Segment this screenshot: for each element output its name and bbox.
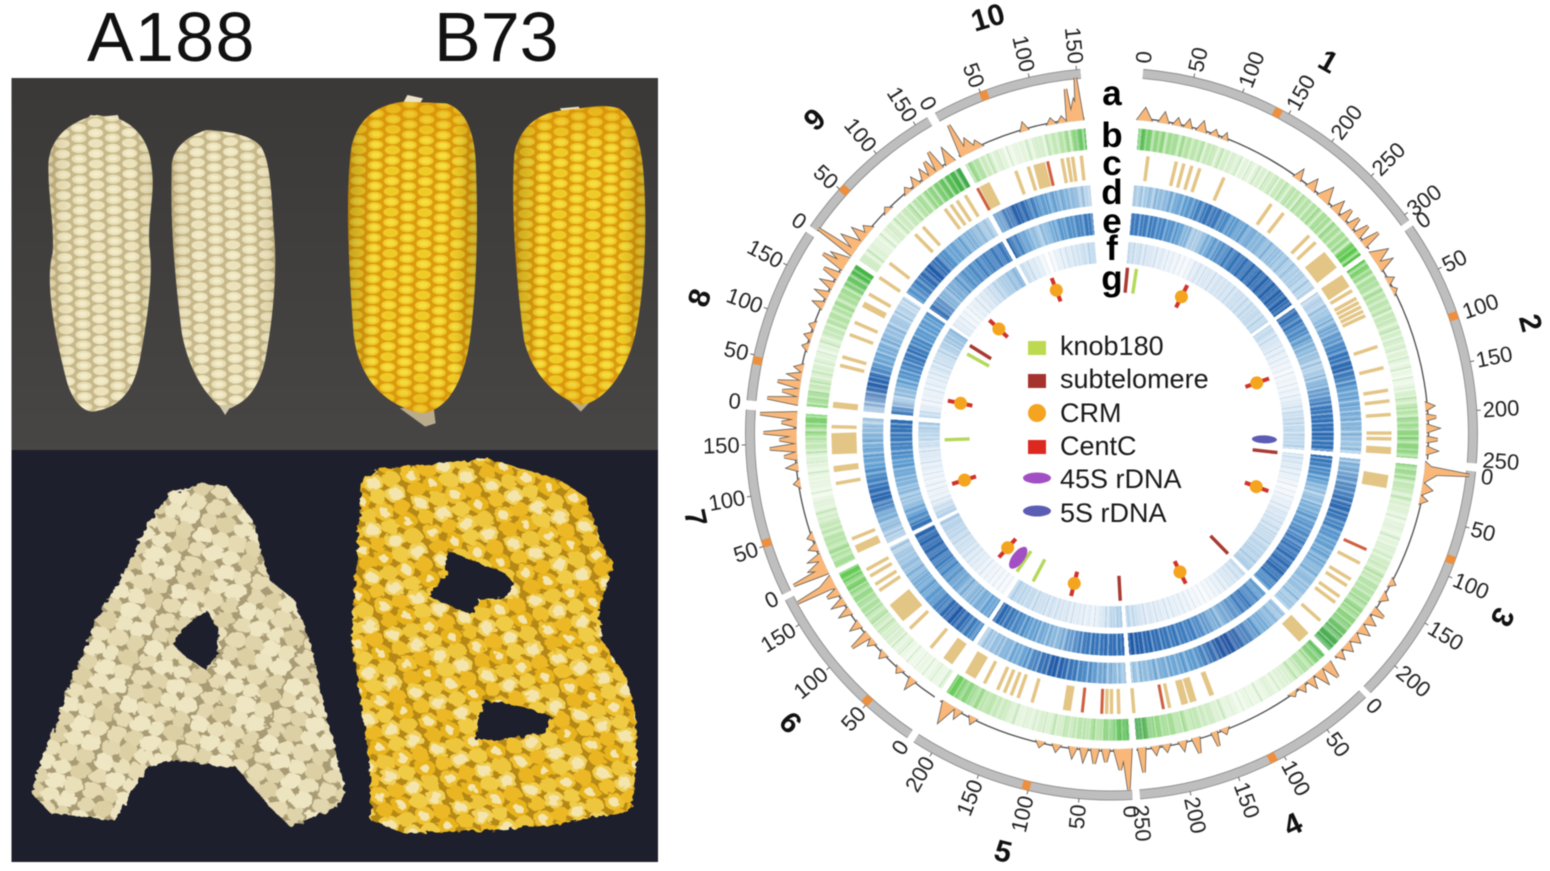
tick labels: right half chromosomes 1 to 4: 0 bbox=[1131, 50, 1157, 64]
track letters a to g: f bbox=[1106, 229, 1118, 268]
legend bbox=[1023, 331, 1209, 528]
chromosome number labels: 3 bbox=[1484, 602, 1520, 632]
tick labels: right half chromosomes 1 to 4: 0 bbox=[1480, 464, 1495, 490]
tick labels: left half chromosomes 5 to 10: 0 bbox=[761, 586, 783, 614]
photo: kernels forming letters A and B bbox=[12, 450, 658, 862]
panel: maize ear and kernel photographs bbox=[10, 0, 659, 863]
track letters a to g: a bbox=[1102, 74, 1122, 113]
tick labels: left half chromosomes 5 to 10: 50 bbox=[730, 536, 761, 568]
tick labels: right half chromosomes 1 to 4: 250 bbox=[1482, 447, 1520, 475]
track g: knob180 bars bbox=[945, 269, 1136, 581]
legend item: 5S rDNA: 5S rDNA bbox=[1060, 498, 1167, 528]
chromosome number labels: 4 bbox=[1278, 806, 1308, 843]
tick labels: right half chromosomes 1 to 4: 0 bbox=[1361, 693, 1387, 719]
chromosome number labels: 7 bbox=[677, 506, 713, 530]
tick labels: left half chromosomes 5 to 10: 0 bbox=[1118, 805, 1144, 818]
legend item: CentC: CentC bbox=[1060, 431, 1137, 461]
ear: B73 right bbox=[513, 106, 645, 412]
chromosome tick marks bbox=[742, 66, 1481, 803]
tick labels: right half chromosomes 1 to 4: 250 bbox=[1367, 137, 1410, 181]
tick labels: left half chromosomes 5 to 10: 0 bbox=[914, 92, 942, 115]
kernels: letter B bbox=[351, 458, 638, 833]
tick labels: left half chromosomes 5 to 10: 50 bbox=[958, 59, 990, 91]
track g: 5S rDNA ellipse bbox=[1252, 435, 1277, 444]
tick labels: right half chromosomes 1 to 4: 50 bbox=[1468, 516, 1498, 547]
chromosome number labels: 9 bbox=[798, 102, 832, 138]
kernels: letter A bbox=[32, 483, 345, 827]
track a: chromosome ideogram ring bbox=[750, 74, 1473, 795]
tick labels: left half chromosomes 5 to 10: 150 bbox=[756, 617, 800, 658]
tick labels: left half chromosomes 5 to 10: 100 bbox=[789, 661, 833, 704]
tick labels: left half chromosomes 5 to 10: 100 bbox=[707, 485, 747, 516]
tick labels: left half chromosomes 5 to 10: 150 bbox=[1060, 26, 1088, 65]
ring d: blue density track bbox=[862, 184, 1362, 684]
legend item: CRM bbox=[1028, 398, 1122, 428]
track g: subtelomere bars bbox=[970, 268, 1277, 601]
tick labels: left half chromosomes 5 to 10: 150 bbox=[882, 82, 923, 127]
tick labels: right half chromosomes 1 to 4: 200 bbox=[1391, 660, 1436, 703]
track letters a to g: c bbox=[1102, 144, 1122, 183]
orange density histogram track bbox=[760, 78, 1470, 790]
chromosome number labels: 5 bbox=[991, 834, 1015, 870]
tick labels: left half chromosomes 5 to 10: 0 bbox=[886, 735, 914, 760]
legend item: knob180: knob180 bbox=[1060, 331, 1164, 361]
tick labels: left half chromosomes 5 to 10 bbox=[703, 26, 1144, 835]
ring b: green density track bbox=[804, 127, 1418, 741]
tick labels: right half chromosomes 1 to 4: 100 bbox=[1449, 567, 1493, 605]
tick labels: left half chromosomes 5 to 10: 100 bbox=[1007, 33, 1040, 74]
tick labels: left half chromosomes 5 to 10: 150 bbox=[743, 234, 787, 273]
chromosome number labels bbox=[677, 0, 1548, 870]
tick labels: right half chromosomes 1 to 4: 300 bbox=[1402, 179, 1446, 221]
centromere markers on ideogram bbox=[752, 90, 1459, 791]
tick labels: left half chromosomes 5 to 10: 100 bbox=[1006, 793, 1039, 835]
panel: circular genome plot heatmap rings bbox=[804, 128, 1420, 742]
tick labels: left half chromosomes 5 to 10: 50 bbox=[836, 701, 871, 736]
tick labels: left half chromosomes 5 to 10: 0 bbox=[787, 207, 811, 235]
track letters a to g: d bbox=[1101, 173, 1123, 212]
tick labels: right half chromosomes 1 to 4: 50 bbox=[1438, 244, 1471, 277]
tick labels: right half chromosomes 1 to 4: 200 bbox=[1482, 395, 1520, 422]
tick labels: left half chromosomes 5 to 10: 50 bbox=[808, 159, 843, 194]
tick labels: right half chromosomes 1 to 4 bbox=[1128, 45, 1520, 842]
legend item: subtelomere: subtelomere bbox=[1060, 364, 1209, 394]
track g: 45S rDNA ellipse bbox=[1006, 544, 1031, 572]
ring e: blue density track bbox=[890, 212, 1334, 656]
tick labels: right half chromosomes 1 to 4: 150 bbox=[1474, 341, 1515, 373]
tick labels: left half chromosomes 5 to 10: 50 bbox=[722, 336, 751, 366]
tick labels: right half chromosomes 1 to 4: 200 bbox=[1325, 100, 1367, 144]
tick labels: right half chromosomes 1 to 4: 150 bbox=[1424, 615, 1468, 656]
track c: tan feature bars bbox=[832, 156, 1391, 714]
tick labels: right half chromosomes 1 to 4: 50 bbox=[1183, 45, 1213, 74]
tick labels: right half chromosomes 1 to 4: 50 bbox=[1321, 727, 1355, 762]
track letters a to g: b bbox=[1101, 116, 1123, 155]
tick labels: left half chromosomes 5 to 10: 0 bbox=[728, 388, 742, 414]
track letters a to g bbox=[1101, 74, 1123, 298]
tick labels: left half chromosomes 5 to 10: 100 bbox=[723, 282, 766, 319]
tick labels: right half chromosomes 1 to 4: 100 bbox=[1276, 756, 1316, 800]
chromosome number labels: 8 bbox=[682, 285, 718, 311]
legend item: CRM: CRM bbox=[1060, 398, 1122, 428]
track letters a to g: g bbox=[1101, 259, 1123, 298]
legend item: 45S rDNA: 45S rDNA bbox=[1060, 464, 1182, 494]
tick labels: right half chromosomes 1 to 4: 250 bbox=[1128, 804, 1156, 842]
heading: A188: A188 bbox=[87, 0, 256, 76]
photo: maize ears bbox=[12, 78, 658, 450]
track g: CentC centromere bars with CRM dots bbox=[948, 278, 1269, 596]
tick labels: right half chromosomes 1 to 4: 100 bbox=[1459, 288, 1502, 324]
tick labels: right half chromosomes 1 to 4: 150 bbox=[1281, 70, 1321, 115]
ring f: light blue density track bbox=[918, 240, 1305, 628]
tick labels: right half chromosomes 1 to 4: 100 bbox=[1233, 48, 1270, 91]
track c: red feature bars bbox=[977, 161, 1366, 714]
tick labels: left half chromosomes 5 to 10: 200 bbox=[900, 752, 940, 796]
tick labels: left half chromosomes 5 to 10: 150 bbox=[703, 433, 740, 459]
tick labels: right half chromosomes 1 to 4: 200 bbox=[1179, 795, 1211, 836]
tick labels: right half chromosomes 1 to 4: 150 bbox=[1229, 779, 1265, 822]
chromosome number labels: 6 bbox=[772, 706, 808, 740]
tick labels: left half chromosomes 5 to 10: 50 bbox=[1064, 803, 1091, 830]
tick labels: left half chromosomes 5 to 10: 100 bbox=[839, 113, 882, 157]
tick labels: right half chromosomes 1 to 4: 0 bbox=[1411, 206, 1435, 234]
track letters a to g: e bbox=[1102, 202, 1122, 241]
heading: B73: B73 bbox=[434, 0, 559, 76]
ear: A188 left bbox=[48, 115, 153, 412]
tick labels: left half chromosomes 5 to 10: 150 bbox=[951, 776, 988, 819]
ear: B73 left bbox=[348, 95, 477, 427]
chromosome number labels: 1 bbox=[1313, 44, 1343, 80]
chromosome number labels: 2 bbox=[1512, 311, 1548, 335]
ear: A188 right bbox=[171, 130, 275, 415]
